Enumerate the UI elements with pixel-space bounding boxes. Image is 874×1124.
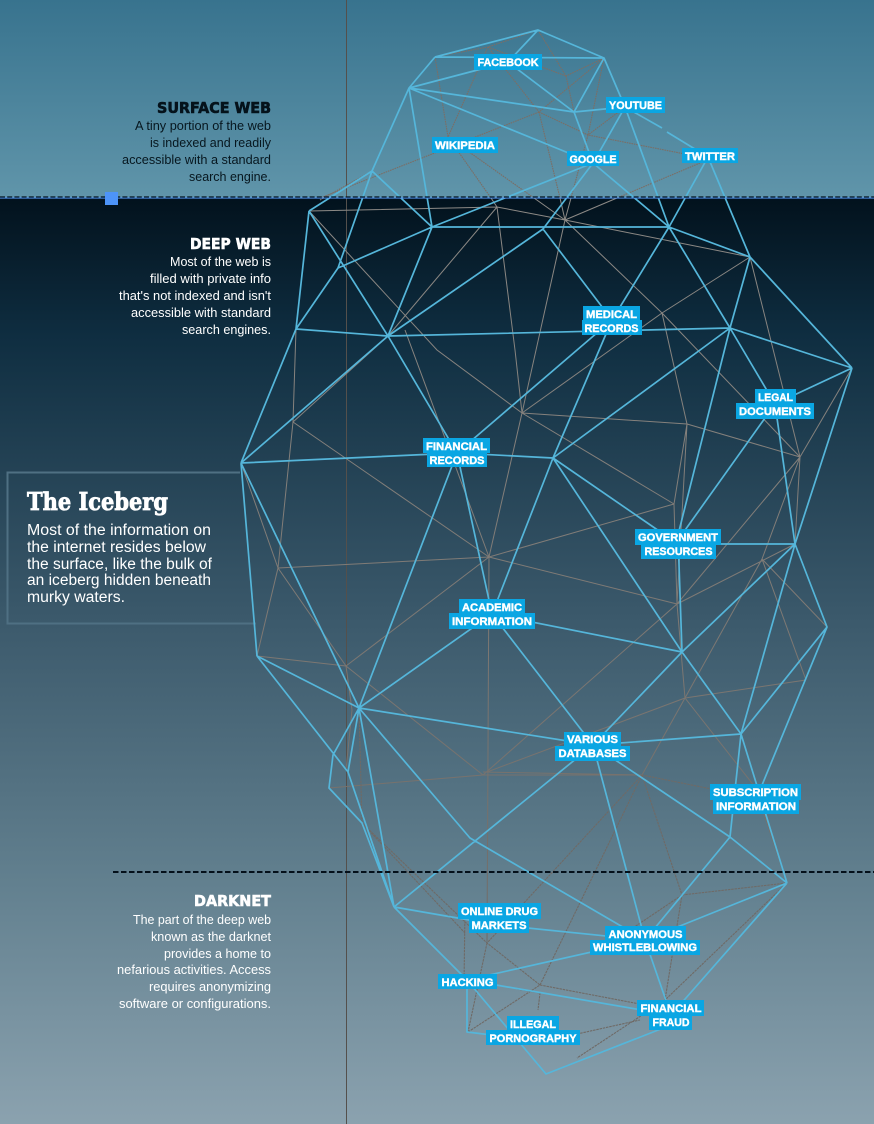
description: The Iceberg: murky waters. [27,589,125,606]
description: surface web: is indexed and readily [150,136,272,150]
vertical guide line [346,0,347,1124]
label: Academic Information: ACADEMIC [462,602,522,614]
label: Various Databases: DATABASES [558,748,626,760]
label: Twitter: TWITTER [685,151,735,163]
iceberg mesh: rear edges above the surface [320,30,700,200]
description: The Iceberg: Most of the information on [27,522,211,539]
label: Facebook [474,54,542,70]
description: The Iceberg: an iceberg hidden beneath [27,572,211,589]
heading: The Iceberg: The Iceberg [27,487,168,516]
label: Subscription Information: INFORMATION [716,801,796,813]
iceberg mesh: front edges [241,30,852,1074]
label: Subscription Information [710,784,801,814]
label: Financial Records [423,438,490,467]
description: surface web: search engine. [189,170,271,184]
description: deep web: search engines. [182,323,271,337]
description: darknet: requires anonymizing [149,980,271,994]
label: Medical Records: MEDICAL [586,309,637,321]
label: Various Databases [555,732,630,761]
label: Legal Documents: LEGAL [758,392,793,404]
label: Legal Documents: DOCUMENTS [739,406,811,418]
label: Online Drug Markets: MARKETS [472,920,526,932]
label: Twitter [682,148,738,163]
waterline marker square [105,192,118,205]
description: deep web: Most of the web is [170,255,271,269]
label: Legal Documents [736,389,814,419]
label: Online Drug Markets [458,903,541,933]
label: Financial Fraud: FRAUD [652,1017,690,1029]
panel: The Iceberg outline [8,472,256,624]
label: Medical Records [582,306,642,335]
label: Government Resources: RESOURCES [644,546,712,558]
label: Medical Records: RECORDS [584,323,638,335]
description: deep web: accessible with standard [131,306,271,320]
darknet dashed boundary [113,871,874,873]
label: YouTube: YOUTUBE [609,100,662,112]
surface waterline [0,197,874,199]
label: Financial Fraud [637,1000,704,1030]
description: darknet: provides a home to [164,947,271,961]
label: Financial Records: RECORDS [430,455,484,467]
label: Anonymous Whistleblowing [590,926,700,955]
description: The Iceberg: the internet resides below [27,539,207,556]
label: Hacking [438,974,497,989]
label: Various Databases: VARIOUS [567,734,618,746]
text block: deep web [119,235,272,337]
label: Government Resources [635,529,721,559]
description: darknet: software or configurations. [119,997,271,1011]
description: surface web [122,119,272,184]
label: YouTube [606,97,665,113]
heading: surface web: SURFACE WEB [157,99,271,117]
label: Hacking: HACKING [442,977,494,989]
label: Subscription Information: SUBSCRIPTION [713,787,798,799]
label: Anonymous Whistleblowing: WHISTLEBLOWING [593,942,697,954]
label: Anonymous Whistleblowing: ANONYMOUS [608,929,682,941]
description: deep web [119,255,272,337]
description: deep web: filled with private info [150,272,271,286]
label: Academic Information [449,599,535,629]
label: Government Resources: GOVERNMENT [638,532,718,544]
text block: darknet [117,892,272,1011]
heading: deep web: DEEP WEB [190,235,271,253]
description: darknet: nefarious activities. Access [117,963,271,977]
label: Illegal Pornography: ILLEGAL [510,1019,556,1031]
label: Wikipedia: WIKIPEDIA [435,140,495,152]
description: The Iceberg [27,522,213,606]
label: Financial Fraud: FINANCIAL [640,1003,702,1015]
label: Academic Information: INFORMATION [452,616,532,628]
description: darknet: known as the darknet [151,930,272,944]
description: darknet: The part of the deep web [133,913,271,927]
iceberg mesh: rear edges in the deep web [241,198,852,943]
description: The Iceberg: the surface, like the bulk of [27,556,213,573]
background: surface water [0,0,874,198]
label: Wikipedia [432,137,498,153]
description: deep web: that's not indexed and isn't [119,289,272,303]
description: surface web: A tiny portion of the web [135,119,271,133]
iceberg mesh: rear edges in the darknet [359,708,787,1058]
description: surface web: accessible with a standard [122,153,271,167]
label: Illegal Pornography: PORNOGRAPHY [490,1033,577,1045]
label: Facebook: FACEBOOK [478,57,539,69]
label: Online Drug Markets: ONLINE DRUG [461,906,538,918]
heading: darknet: DARKNET [194,892,272,910]
label: Google: GOOGLE [570,154,616,166]
text block: The Iceberg [27,487,213,606]
label: Financial Records: FINANCIAL [426,441,487,453]
text block: surface web [122,99,272,184]
label: Illegal Pornography [486,1016,580,1045]
description: darknet [117,913,272,1011]
